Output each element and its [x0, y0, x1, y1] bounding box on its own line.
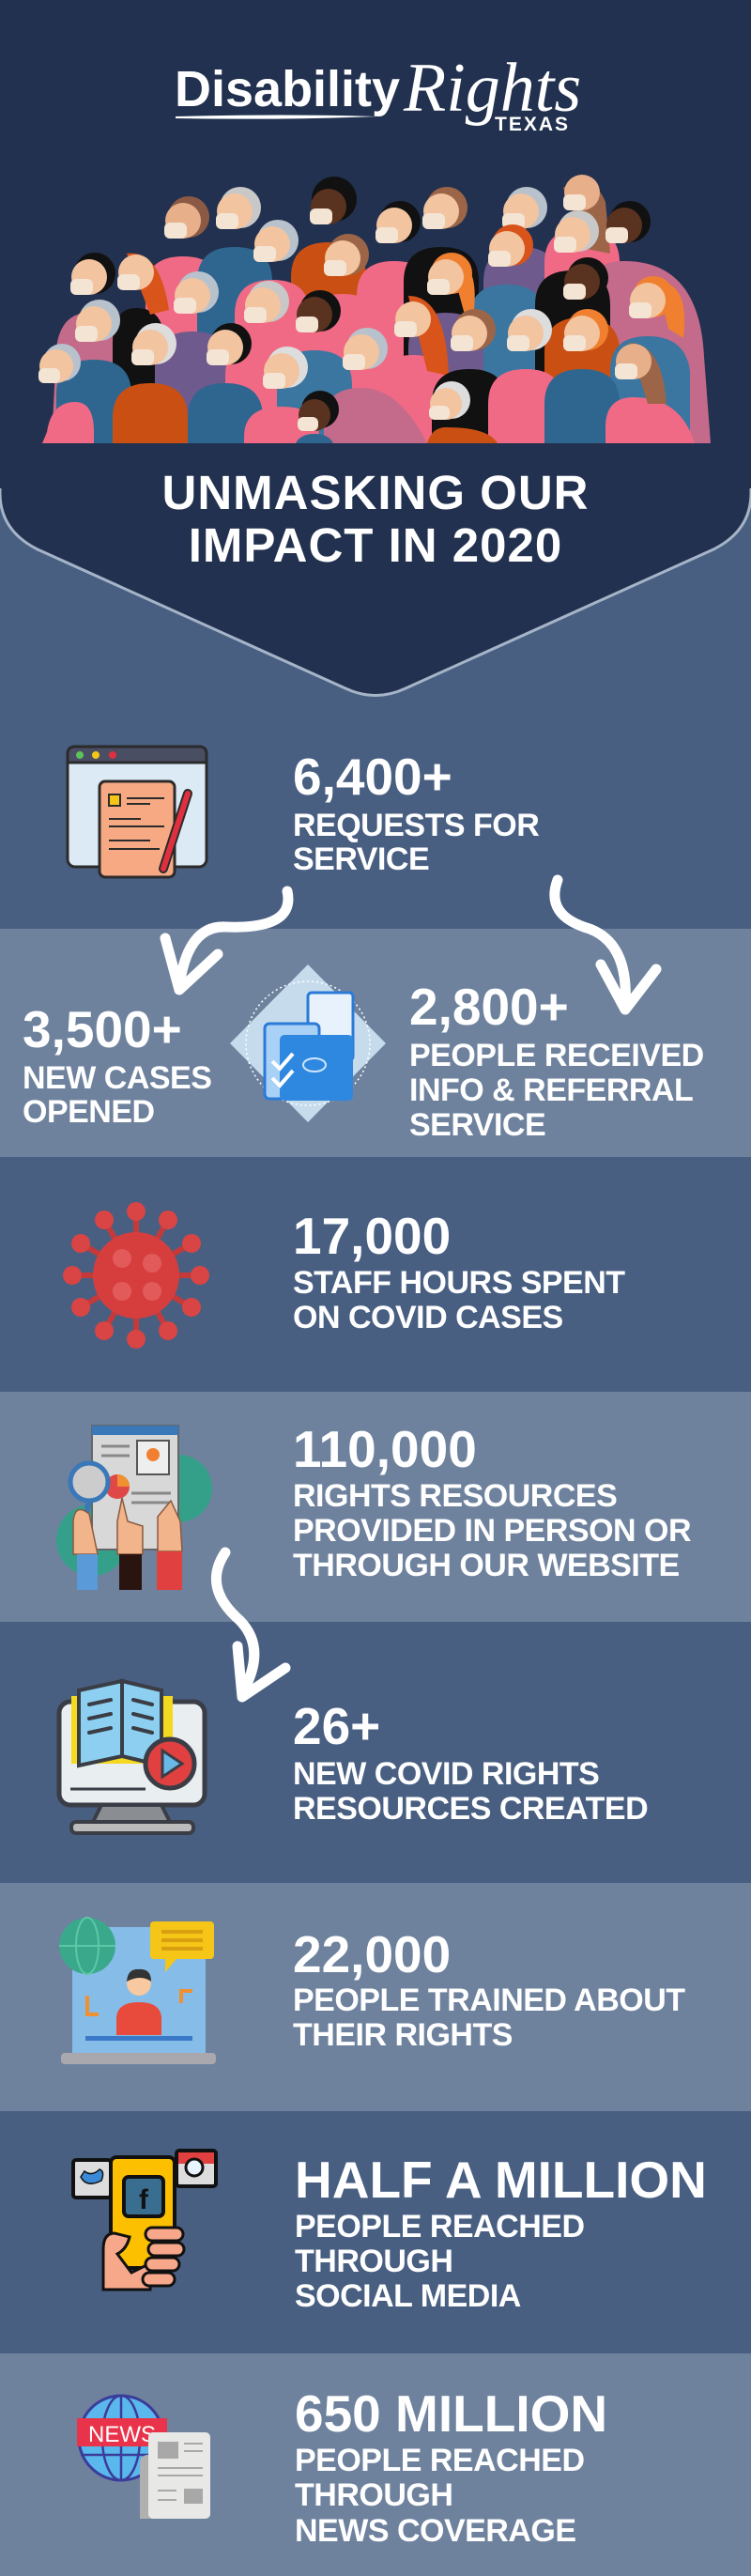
stat: 22,000: PEOPLE TRAINED ABOUT	[293, 1982, 685, 2018]
stat: 110,000: RIGHTS RESOURCES	[293, 1478, 617, 1514]
title: IMPACT IN 2020	[189, 518, 562, 572]
stat: 17,000: STAFF HOURS SPENT	[293, 1265, 625, 1301]
stat: 650 million	[295, 2384, 607, 2549]
arrow: to info & referral	[555, 880, 656, 1010]
icon: online training laptop	[59, 1918, 216, 2064]
stat: 650 million: THROUGH	[295, 2477, 452, 2513]
icon: virus	[63, 1202, 209, 1349]
stat: 3,500+: 3,500+	[23, 1000, 182, 1058]
stat: 22,000: THEIR RIGHTS	[293, 2017, 513, 2053]
stat: half a million: HALF A MILLION	[295, 2151, 707, 2209]
stat: 26+: NEW COVID RIGHTS	[293, 1756, 599, 1792]
stat: 6,400+: REQUESTS FOR	[293, 808, 539, 843]
stat: half a million: THROUGH	[295, 2244, 452, 2279]
stat: 2,800+: PEOPLE RECEIVED	[409, 1038, 704, 1073]
stat: 3,500+: NEW CASES	[23, 1060, 211, 1096]
stat: 650 million: PEOPLE REACHED	[295, 2443, 584, 2478]
stat: half a million: SOCIAL MEDIA	[295, 2278, 521, 2314]
title	[161, 466, 590, 572]
stat: 2,800+	[409, 978, 704, 1143]
stat: 6,400+: SERVICE	[293, 841, 429, 877]
stat: 2,800+: 2,800+	[409, 978, 569, 1036]
stat: 17,000	[293, 1207, 625, 1335]
stat: 3,500+: OPENED	[23, 1094, 155, 1130]
title: UNMASKING OUR	[161, 466, 590, 519]
stat: half a million	[295, 2151, 707, 2314]
icon: request form in browser	[68, 747, 207, 877]
stat: 6,400+	[293, 748, 539, 877]
icon: folder documents	[230, 964, 386, 1122]
icon: phone with social media: f	[139, 2184, 149, 2215]
arrow: to new covid resources	[216, 1552, 285, 1697]
stat: 110,000: THROUGH OUR WEBSITE	[293, 1548, 680, 1583]
stat: 650 million: NEWS COVERAGE	[295, 2513, 576, 2549]
stat: 17,000: 17,000	[293, 1207, 451, 1265]
icon: phone with social media	[73, 2151, 216, 2290]
stat: 22,000: 22,000	[293, 1925, 451, 1983]
stat: 6,400+: 6,400+	[293, 748, 452, 806]
stat: 110,000: 110,000	[293, 1420, 477, 1478]
stat: 26+	[293, 1697, 648, 1827]
stat: 22,000	[293, 1925, 685, 2053]
logo: Disability	[175, 61, 400, 117]
stat: 26+: RESOURCES CREATED	[293, 1791, 648, 1827]
stat: 110,000	[293, 1420, 691, 1583]
icon: news globe and newspaper	[77, 2396, 210, 2519]
arrow: to new cases	[165, 891, 288, 990]
stat: 2,800+: INFO & REFERRAL	[409, 1072, 693, 1108]
logo	[175, 50, 581, 135]
header panel	[0, 0, 751, 695]
logo: Rights	[403, 50, 581, 127]
icon: news globe and newspaper: NEWS	[88, 2422, 156, 2447]
crowd illustration	[38, 175, 711, 443]
stat: 2,800+: SERVICE	[409, 1107, 545, 1143]
stat: 110,000: PROVIDED IN PERSON OR	[293, 1513, 691, 1549]
stat: 650 million: 650 MILLION	[295, 2384, 607, 2443]
stat: 26+: 26+	[293, 1697, 380, 1755]
icon: rights resources	[56, 1426, 212, 1590]
stat: half a million: PEOPLE REACHED	[295, 2209, 584, 2244]
logo: TEXAS	[495, 114, 570, 135]
icon: monitor with book and play	[59, 1681, 205, 1833]
stat: 3,500+	[23, 1000, 211, 1130]
stat: 17,000: ON COVID CASES	[293, 1300, 563, 1335]
